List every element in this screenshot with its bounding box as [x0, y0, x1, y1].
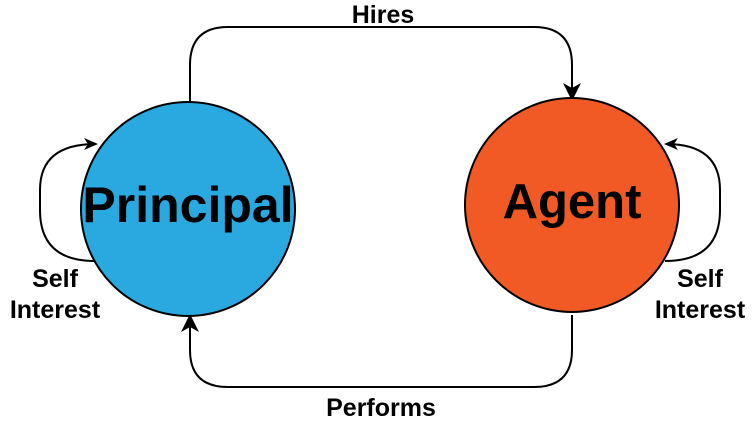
arrow: performs [190, 315, 572, 387]
label: self interest left: Interest [10, 296, 101, 324]
label: self interest left: Self [32, 265, 79, 293]
circle: principal: Principal [82, 177, 294, 233]
arrow: self interest right [665, 144, 720, 261]
label: self interest right: Interest [655, 296, 746, 324]
label: performs: Performs [326, 394, 436, 422]
circle: agent [465, 98, 679, 312]
circle: agent: Agent [503, 175, 641, 229]
label: self interest right: Self [677, 265, 724, 293]
arrow: hires [190, 27, 572, 101]
circle: principal [81, 102, 295, 316]
label: hires: Hires [352, 1, 414, 29]
arrow: self interest left [40, 144, 96, 261]
